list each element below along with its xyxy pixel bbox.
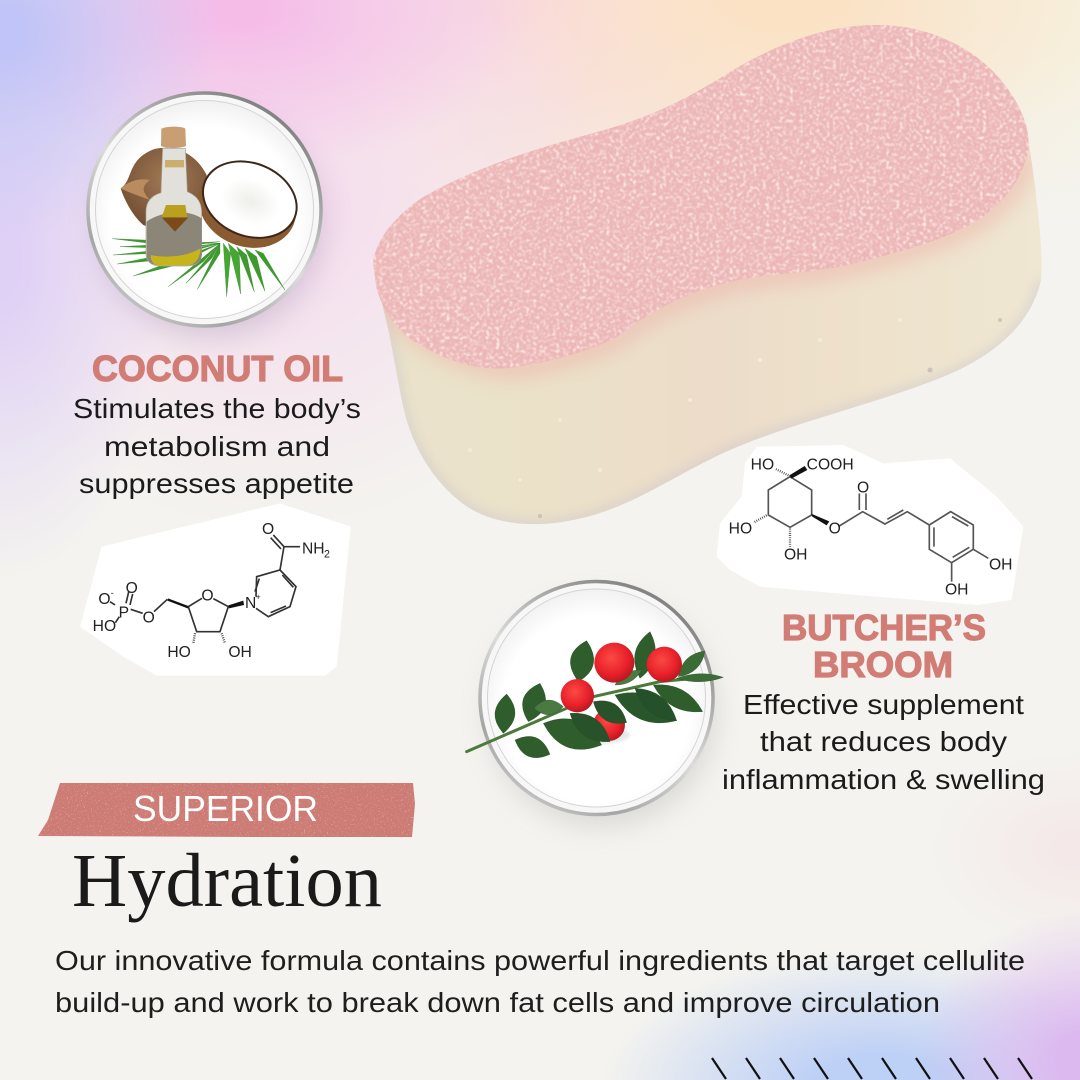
- molecule diagram: nicotinamide riboside: 2: [324, 549, 330, 561]
- molecule diagram: nicotinamide riboside: O: [262, 521, 274, 538]
- whole coconut: [121, 148, 207, 227]
- coconut oil description: Stimulates the body’s: [73, 393, 361, 424]
- icon: coconut, oil bottle and palm leaf: [112, 127, 310, 297]
- molecule diagram: chlorogenic acid: HO: [729, 521, 752, 538]
- dish rim: [88, 93, 321, 326]
- paragraph: [55, 945, 1025, 1018]
- molecule diagram: nicotinamide riboside: +: [256, 591, 261, 601]
- dish rim: [480, 582, 713, 814]
- coconut oil heading: COCONUT OIL: [92, 348, 343, 389]
- dish: butcher's broom: [467, 582, 723, 826]
- molecule diagram: nicotinamide riboside: O: [126, 580, 138, 597]
- molecule diagram: nicotinamide riboside: O: [201, 588, 214, 605]
- icon: red berry branch: [467, 632, 723, 758]
- tape label: [38, 783, 415, 837]
- molecule diagram: nicotinamide riboside: P: [119, 604, 129, 621]
- butcher's broom heading: BROOM: [813, 644, 953, 685]
- oil bottle: [146, 148, 202, 266]
- butcher's broom description: inflammation & swelling: [722, 764, 1045, 795]
- paragraph: Our innovative formula contains powerful ingredients that target cellulite: [55, 945, 1025, 976]
- butcher's broom description: [722, 689, 1045, 795]
- molecule diagram: chlorogenic acid: [717, 445, 1023, 605]
- molecule diagram: nicotinamide riboside: -: [111, 588, 114, 598]
- coconut oil description: metabolism and: [104, 431, 330, 462]
- molecule diagram: nicotinamide riboside: HO: [93, 618, 116, 635]
- molecule diagram: nicotinamide riboside: N: [245, 595, 256, 612]
- main heading: Hydration: [72, 839, 382, 923]
- dish: coconut oil: [88, 93, 324, 338]
- paragraph: build-up and work to break down fat cells and improve circulation: [55, 987, 940, 1018]
- molecule diagram: nicotinamide riboside: O: [143, 610, 155, 627]
- butcher's broom description: that reduces body: [760, 726, 1007, 757]
- molecule diagram: chlorogenic acid: O: [857, 480, 869, 497]
- dish shadow: [488, 598, 716, 826]
- molecule diagram: nicotinamide riboside: NH: [302, 540, 325, 557]
- molecule diagram: chlorogenic acid: HO: [751, 457, 774, 474]
- butcher's broom heading: [782, 607, 986, 685]
- tape label: SUPERIOR: [133, 788, 318, 829]
- palm leaf: [112, 239, 285, 297]
- coconut oil description: suppresses appetite: [79, 468, 354, 499]
- molecule diagram: chlorogenic acid: OH: [989, 556, 1012, 573]
- butcher's broom description: Effective supplement: [743, 689, 1024, 720]
- sponge product: [373, 25, 1042, 524]
- molecule diagram: chlorogenic acid: O: [829, 521, 841, 538]
- molecule diagram: nicotinamide riboside: [80, 503, 351, 676]
- sponge pink top: [373, 25, 1029, 369]
- butcher's broom heading: BUTCHER’S: [782, 607, 986, 648]
- molecule diagram: nicotinamide riboside: O: [98, 591, 111, 608]
- dish shadow: [96, 110, 324, 338]
- molecule diagram: nicotinamide riboside: OH: [228, 644, 252, 661]
- sponge body edge shading: [376, 152, 1041, 524]
- molecule diagram: chlorogenic acid: OH: [784, 547, 807, 564]
- coconut half: [186, 146, 310, 262]
- decorative diagonal hatch marks: [712, 1058, 1032, 1079]
- molecule diagram: nicotinamide riboside: HO: [167, 644, 191, 661]
- molecule diagram: chlorogenic acid: COOH: [807, 457, 854, 474]
- sponge body: [381, 130, 1042, 524]
- molecule diagram: chlorogenic acid: OH: [945, 582, 968, 599]
- coconut oil description: [73, 393, 361, 499]
